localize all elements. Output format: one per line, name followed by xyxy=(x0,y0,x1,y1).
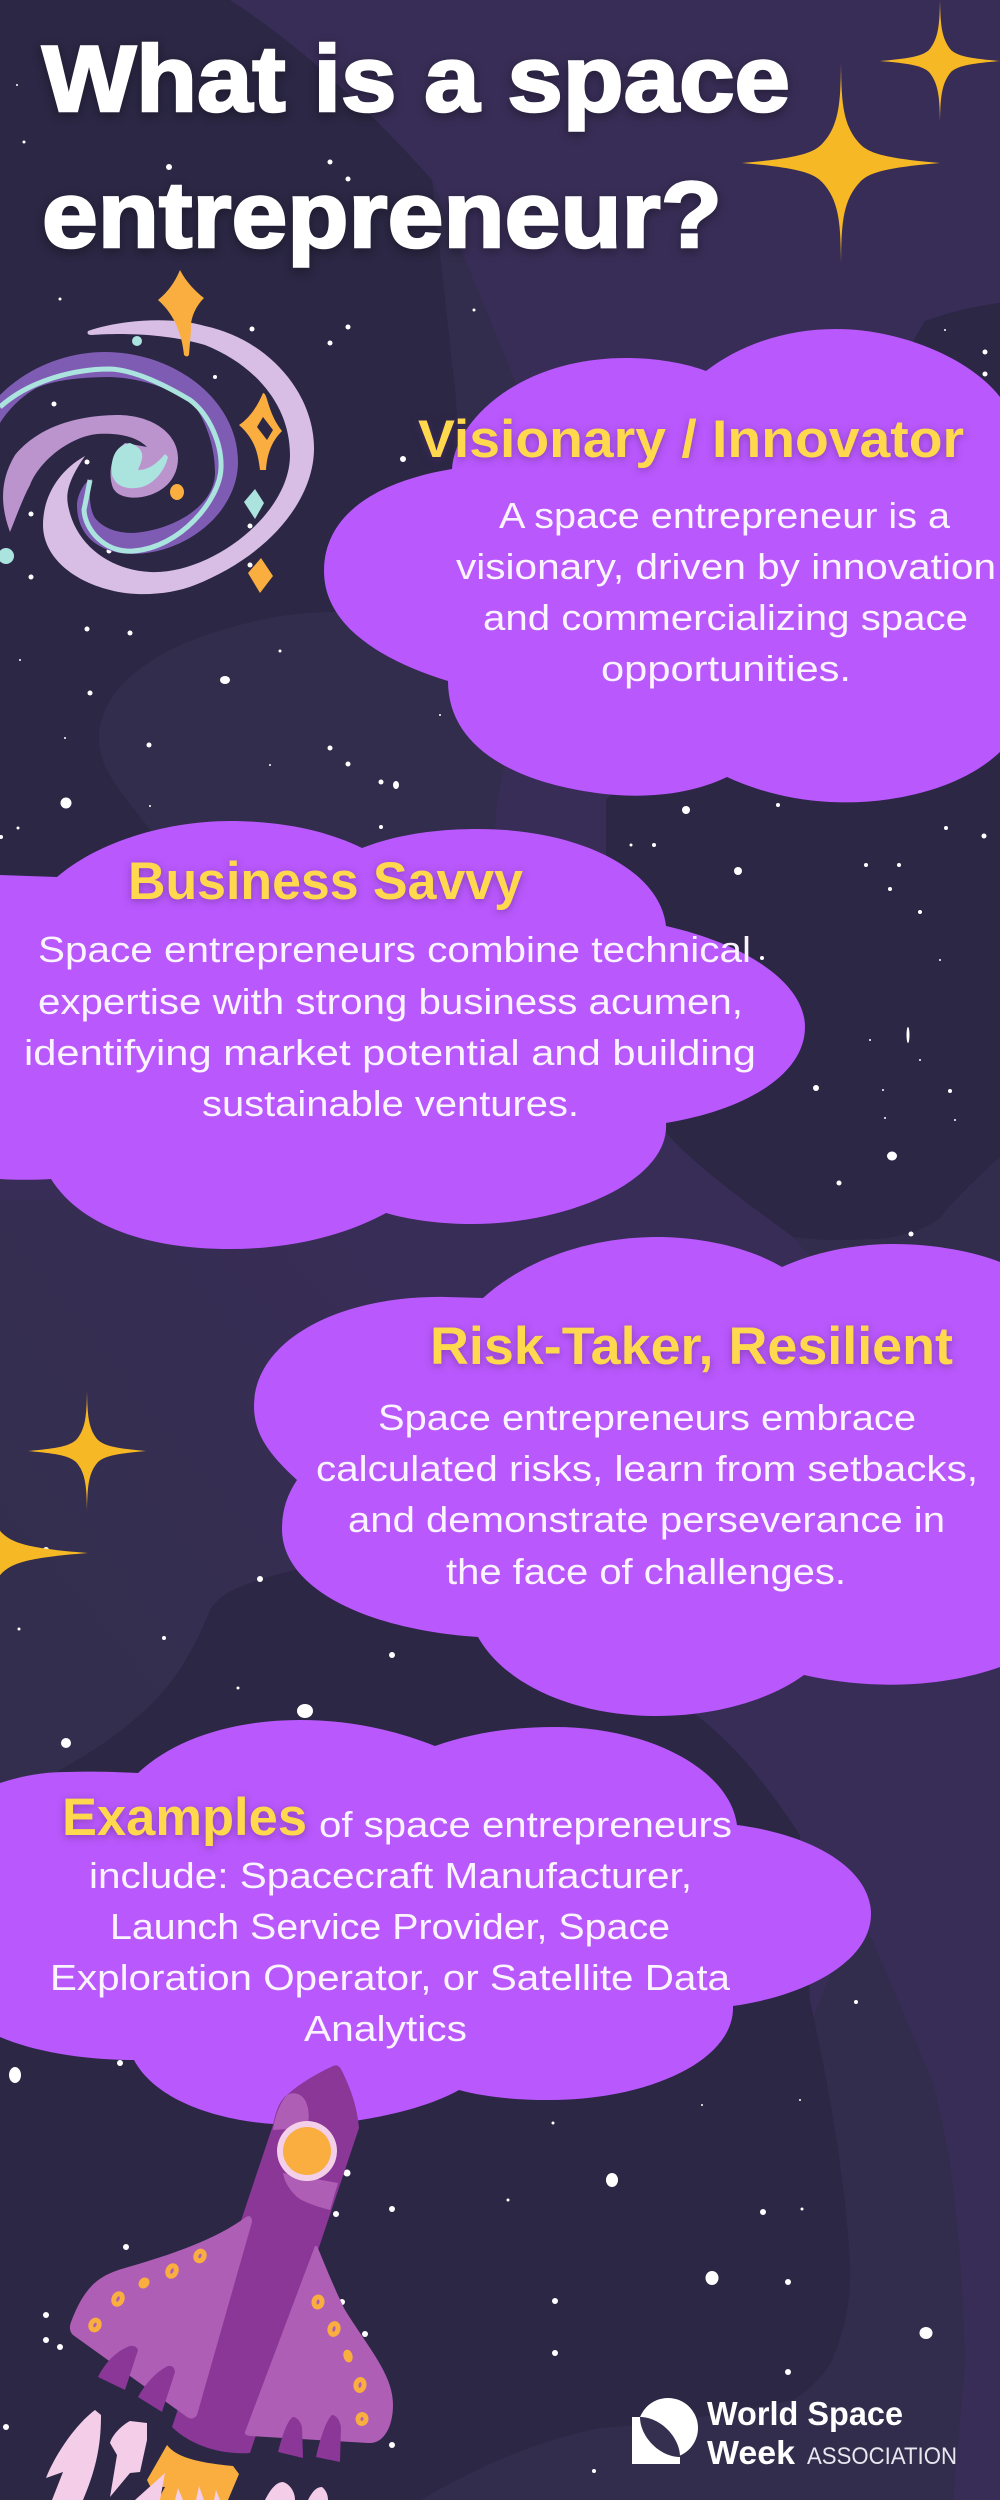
body text xyxy=(24,929,756,1124)
body text: Launch Service Provider, Space xyxy=(110,1906,670,1947)
body text: Exploration Operator, or Satellite Data xyxy=(50,1957,731,1998)
heading: Risk-Taker, Resilient xyxy=(430,1317,953,1376)
galaxy teal core xyxy=(112,443,168,488)
rocket body xyxy=(172,2065,359,2453)
rocket window xyxy=(277,2121,337,2181)
rocket fins xyxy=(98,2346,341,2462)
body text: identifying market potential and building xyxy=(24,1032,756,1073)
galaxy orange ring star xyxy=(239,393,282,470)
galaxy outer arm xyxy=(43,320,314,594)
panel: Visionary / Innovator xyxy=(324,329,1000,802)
body text: of space entrepreneurs xyxy=(319,1804,732,1845)
cloud shape xyxy=(0,821,805,1249)
galaxy teal diamond xyxy=(244,489,264,519)
rocket exhaust flames xyxy=(46,2410,328,2500)
body text: opportunities. xyxy=(601,648,851,689)
panel: Business Savvy xyxy=(0,821,805,1249)
body text: the face of challenges. xyxy=(446,1551,846,1592)
panel: Examples xyxy=(0,1720,871,2125)
logo wordmark: World Space xyxy=(707,2395,903,2432)
logo wordmark second line: Week xyxy=(707,2434,796,2471)
body text xyxy=(316,1397,978,1592)
galaxy orange four-point star xyxy=(158,270,204,356)
body text xyxy=(456,495,996,689)
body text: Analytics xyxy=(304,2008,467,2049)
icon: large gold sparkle xyxy=(742,63,940,263)
logo mark xyxy=(632,2398,698,2464)
rocket portholes xyxy=(89,2250,367,2424)
galaxy dots xyxy=(0,336,184,564)
title xyxy=(42,26,790,267)
galaxy purple arm xyxy=(0,352,238,554)
title: entrepreneur? xyxy=(42,162,722,267)
title: What is a space xyxy=(42,26,790,131)
rocket body highlights xyxy=(273,2093,338,2210)
body text xyxy=(50,1804,732,2049)
body text: include: Spacecraft Manufacturer, xyxy=(89,1855,692,1896)
illustration: spiral galaxy xyxy=(0,270,314,594)
body text: A space entrepreneur is a xyxy=(499,495,951,536)
decorative gold sparkles xyxy=(0,0,1000,1659)
heading: Examples xyxy=(62,1788,307,1847)
body text: visionary, driven by innovation xyxy=(456,546,996,587)
body text: sustainable ventures. xyxy=(202,1083,579,1124)
heading: Visionary / Innovator xyxy=(418,410,964,469)
icon: small gold sparkle xyxy=(880,0,1000,122)
cloud shape xyxy=(0,1720,871,2125)
panel: Risk-Taker, Resilient xyxy=(254,1237,1000,1716)
galaxy teal line xyxy=(0,369,221,551)
icon: clipped gold sparkle at left edge xyxy=(0,1447,88,1659)
cloud shape xyxy=(254,1237,1000,1716)
illustration: rocket xyxy=(46,2065,393,2500)
body text: and commercializing space xyxy=(483,597,968,638)
galaxy orange diamond xyxy=(248,558,273,593)
body text: calculated risks, learn from setbacks, xyxy=(316,1448,978,1489)
body text: Space entrepreneurs combine technical xyxy=(38,929,751,970)
logo: World Space Week Association xyxy=(632,2395,957,2471)
body text: expertise with strong business acumen, xyxy=(38,981,743,1022)
body text: and demonstrate perseverance in xyxy=(348,1499,945,1540)
logo association label: ASSOCIATION xyxy=(807,2443,957,2470)
galaxy inner arm xyxy=(3,415,178,532)
cloud shape xyxy=(324,329,1000,802)
rocket left wing xyxy=(70,2216,252,2419)
heading: Business Savvy xyxy=(128,852,524,911)
icon: mid-left gold sparkle xyxy=(28,1391,146,1511)
rocket right wing xyxy=(245,2246,393,2443)
body text: Space entrepreneurs embrace xyxy=(378,1397,916,1438)
